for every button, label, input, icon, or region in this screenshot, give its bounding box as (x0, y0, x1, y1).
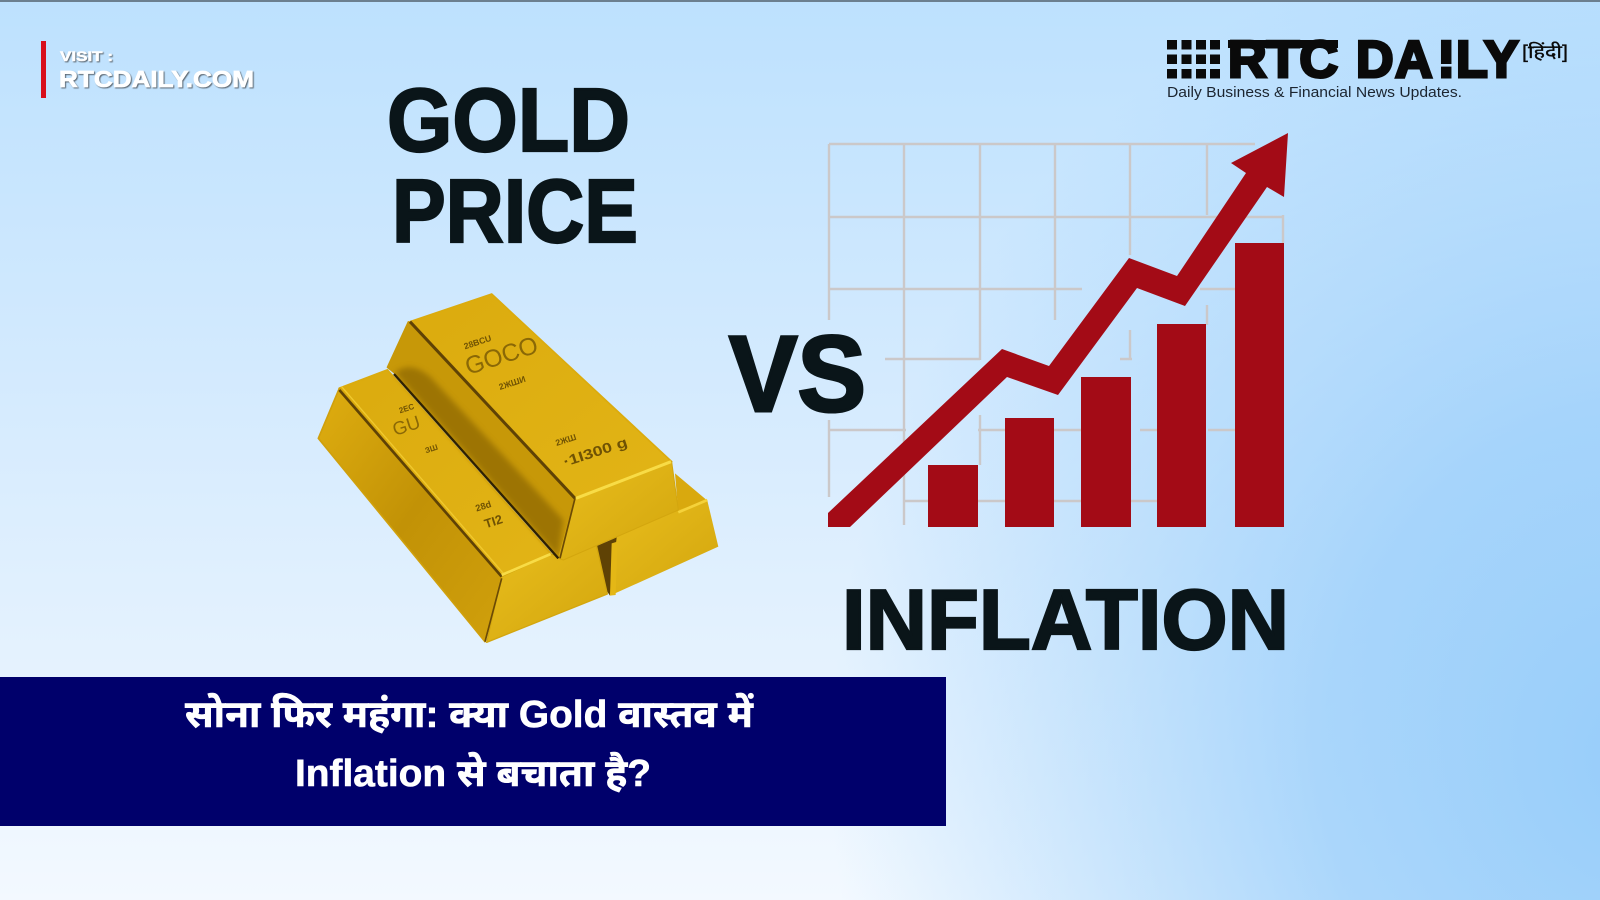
left lower bar: ЗШ (424, 443, 439, 455)
visit label: VISIT : (60, 49, 113, 64)
heading: gold price: PRICE (392, 162, 638, 262)
top gold bar: 2ЖШИ (498, 374, 527, 392)
left lower bar: GU (390, 411, 423, 440)
inflation chart (828, 133, 1288, 527)
bar 1 (928, 465, 978, 527)
logo hindi tag: [हिंदी] (1522, 41, 1568, 62)
heading: VS: VS (729, 313, 866, 434)
red accent bar (41, 41, 46, 98)
website url: RTCDAILY.COM (59, 66, 254, 92)
bar 4 (1157, 324, 1206, 527)
bar 3 (1081, 377, 1131, 527)
logo grid icon (1167, 40, 1220, 78)
visit website tag (41, 41, 254, 98)
chart grid (829, 144, 1283, 525)
left lower bar: 28d (474, 499, 493, 514)
top gold bar: 28BCU (463, 333, 493, 351)
rising arrow (828, 133, 1288, 527)
banner background (0, 677, 946, 826)
logo wordmark DAILY: DAILY (1356, 31, 1519, 89)
left lower bar: 2EC (398, 402, 416, 415)
top gold bar (387, 294, 678, 560)
top gold bar: GOCO (462, 332, 542, 381)
logo wordmark RTC: RTC (1228, 31, 1338, 89)
left lower bar: TI2 (483, 512, 504, 531)
heading: gold price (387, 71, 638, 262)
bar 2 (1005, 418, 1054, 527)
heading: inflation: INFLATION (842, 573, 1289, 668)
left lower bar (318, 370, 607, 642)
logo tagline: Daily Business & Financial News Updates. (1167, 84, 1462, 101)
right lower bar (595, 473, 718, 596)
top gold bar: 2ЖШ (554, 432, 578, 448)
logo: RTC Daily Hindi (1167, 31, 1568, 101)
headline banner (0, 677, 946, 826)
headline line 1: सोना फिर महंगा: क्या Gold वास्तव में (185, 692, 754, 736)
top gold bar: ·1I300 g (561, 434, 629, 470)
bar 5 (1235, 243, 1284, 527)
icon: gold bars (318, 294, 718, 642)
heading: gold price: GOLD (387, 71, 630, 171)
headline line 2: Inflation से बचाता है? (295, 751, 651, 795)
